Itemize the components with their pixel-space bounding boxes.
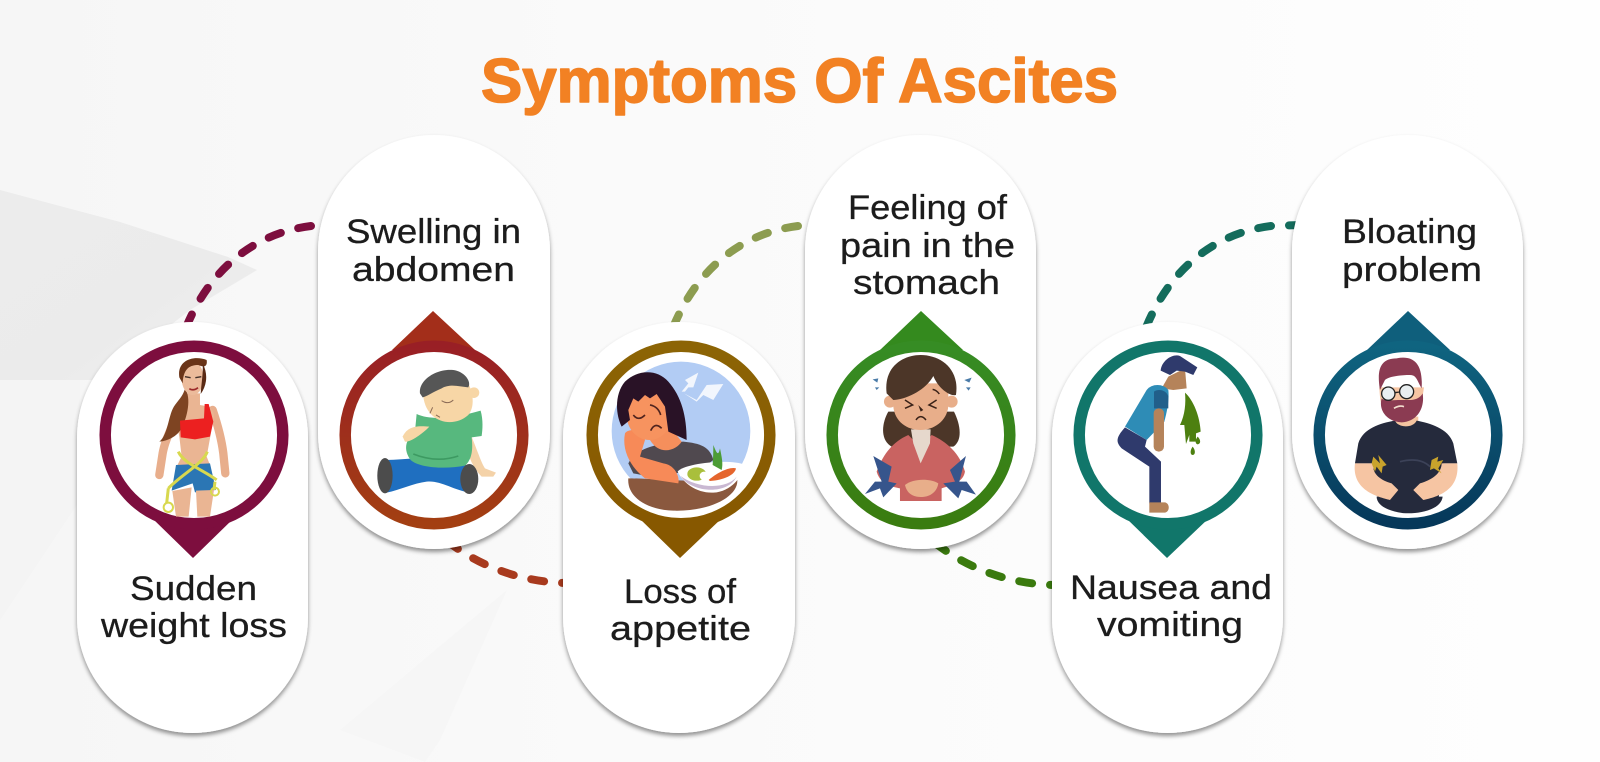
pointer and ring: [105, 346, 283, 558]
label: pain in the: [840, 227, 1015, 265]
label: Sudden: [130, 570, 257, 608]
icon: boy with swollen belly: [377, 370, 496, 494]
label: Bloating: [1342, 213, 1477, 251]
pointer and ring: [1079, 346, 1257, 558]
label: stomach: [853, 264, 1000, 302]
label: problem: [1342, 251, 1482, 289]
panel: sudden weight loss: [77, 322, 308, 733]
panel: loss of appetite: [563, 322, 795, 733]
label: [1070, 569, 1272, 644]
panel: nausea and vomiting: [1052, 322, 1283, 733]
label: appetite: [610, 610, 751, 648]
label: Feeling of: [848, 189, 1008, 227]
label: Loss of: [624, 573, 737, 611]
icon: woman measuring waist: [159, 358, 225, 517]
dashed connector: weight loss to swelling: [185, 226, 311, 330]
pointer and ring: [832, 311, 1010, 524]
label: [346, 213, 521, 289]
pointer and ring: [592, 346, 770, 558]
label: [1342, 213, 1482, 289]
pointer and ring: [1319, 311, 1497, 524]
icon: man vomiting: [1118, 355, 1201, 513]
label: [610, 573, 751, 648]
label: Nausea and: [1070, 569, 1272, 607]
icon: man with bloated stomach: [1355, 358, 1458, 513]
label: [100, 570, 287, 645]
label: Swelling in: [346, 213, 521, 251]
panel: bloating problem: [1292, 135, 1523, 549]
icon: tired woman with food: [612, 362, 750, 511]
dashed connector: appetite to stomach pain: [672, 226, 798, 330]
icon: woman with stomach pain: [865, 355, 976, 501]
title: Symptoms Of Ascites: [481, 47, 1118, 116]
label: [840, 189, 1015, 302]
label: abdomen: [352, 251, 515, 289]
label: vomiting: [1097, 606, 1243, 644]
panel: swelling in abdomen: [318, 135, 550, 549]
panel: feeling of pain in the stomach: [805, 135, 1036, 549]
label: weight loss: [100, 607, 287, 645]
dashed connector: stomach pain to nausea: [928, 537, 1063, 585]
dashed connector: swelling to appetite: [440, 535, 575, 583]
dashed connector: nausea to bloating: [1145, 225, 1302, 330]
pointer and ring: [345, 311, 523, 524]
